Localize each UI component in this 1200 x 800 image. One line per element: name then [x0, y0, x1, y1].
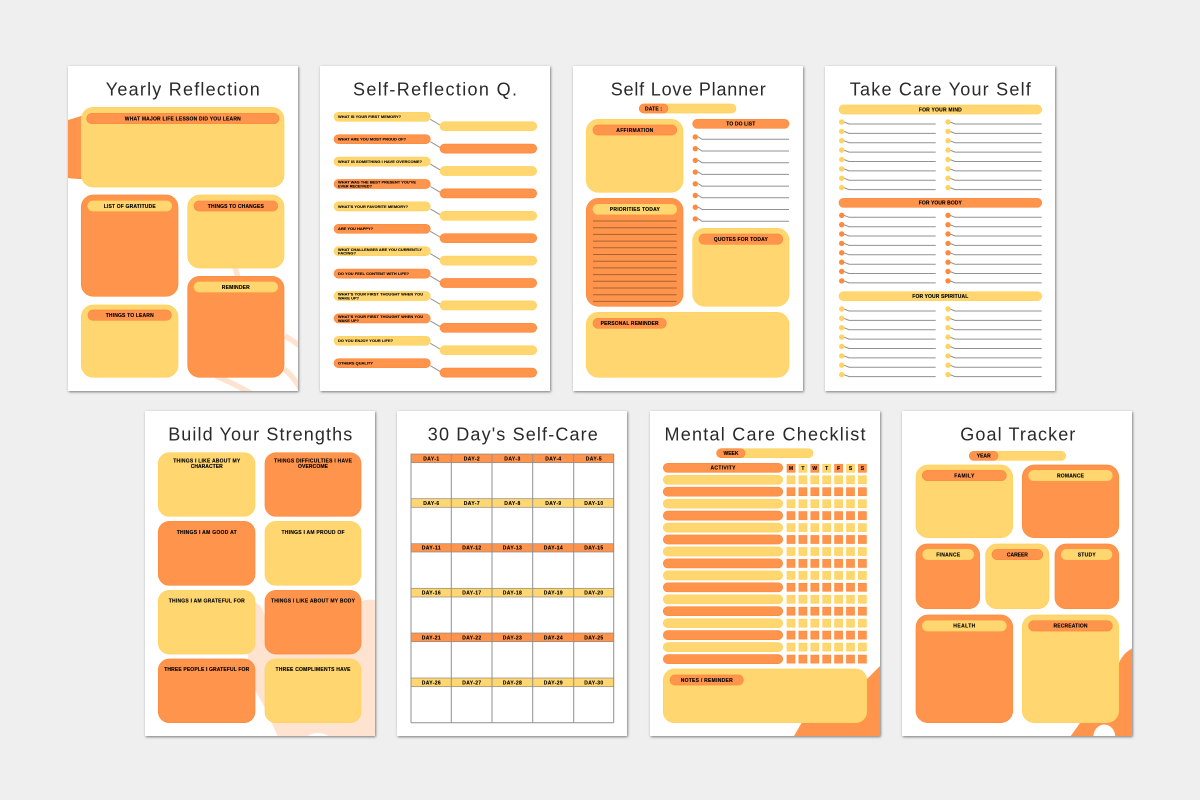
day labels: DAY-13	[503, 546, 522, 552]
panel: recreation	[1022, 615, 1119, 723]
day labels: DAY-22	[462, 635, 481, 641]
day labels: DAY-29	[544, 680, 563, 686]
day labels: DAY-2	[464, 456, 480, 462]
question row 11: DO YOU ENJOY YOUR LIFE?	[338, 338, 394, 343]
day labels: DAY-4	[545, 456, 561, 462]
week field	[717, 449, 813, 458]
title: Take Care Your Self	[850, 80, 1032, 100]
day labels: DAY-11	[422, 546, 441, 552]
ruled lines	[593, 221, 677, 301]
question row 12: OTHERS QUALITY	[338, 361, 373, 366]
panel: like about my character	[158, 453, 255, 516]
panel: three compliments: THREE COMPLIMENTS HAVE	[276, 667, 351, 673]
day labels: DAY-19	[544, 591, 563, 597]
title: Yearly Reflection	[106, 80, 260, 100]
label	[593, 318, 666, 328]
day labels: DAY-9	[545, 501, 561, 507]
page: Self Love Planner	[573, 66, 803, 391]
lines	[844, 122, 1042, 190]
day labels: DAY-30	[584, 680, 603, 686]
panel: difficulties overcome	[265, 453, 361, 516]
question row 6	[334, 224, 537, 243]
page: Yearly Reflection	[68, 66, 300, 394]
decorative corner	[794, 666, 880, 736]
panel: notes / reminder	[663, 669, 867, 723]
panel: family	[916, 465, 1013, 538]
weekday headers: F	[837, 466, 840, 472]
day labels: DAY-14	[544, 546, 563, 552]
year field: YEAR	[977, 454, 991, 460]
activity rows: ACTIVITY	[710, 466, 736, 472]
question row 9	[334, 292, 537, 310]
bullets	[839, 119, 951, 190]
label: RECREATION	[1054, 624, 1088, 630]
panel: major life lesson	[81, 107, 284, 187]
question row 10: WAKE UP?	[338, 318, 360, 323]
page: Build Your Strengths	[145, 411, 375, 743]
question row 10: WHAT'S YOUR FIRST THOUGHT WHEN YOU	[338, 314, 423, 319]
section: for your body: FOR YOUR BODY	[919, 201, 962, 207]
label: HEALTH	[953, 624, 976, 630]
question row 3	[334, 157, 537, 176]
calendar table	[411, 454, 614, 723]
label	[670, 675, 743, 685]
panel: like about my character: CHARACTER	[191, 464, 223, 470]
day labels: DAY-15	[584, 546, 603, 552]
question row 2	[334, 135, 537, 153]
panel: like about my body: THINGS I LIKE ABOUT MY BODY	[271, 598, 356, 604]
weekday headers: S	[849, 466, 853, 472]
decorative blob	[1070, 648, 1132, 736]
decorative blob	[248, 600, 375, 743]
question row 4: EVER RECEIVED?	[338, 183, 373, 188]
label: REMINDER	[222, 285, 250, 291]
day labels: DAY-27	[462, 680, 481, 686]
label: LIST OF GRATITUDE	[104, 204, 156, 210]
panel: three people	[158, 659, 255, 723]
to do bullets	[693, 134, 698, 222]
weekday headers: S	[861, 466, 865, 472]
label: FAMILY	[954, 473, 975, 479]
label: THINGS TO LEARN	[106, 313, 154, 319]
day labels: DAY-3	[504, 456, 521, 462]
question row 8	[334, 269, 537, 288]
question row 2: WHAT ARE YOU MOST PROUD OF?	[338, 137, 407, 142]
question row 7: WHAT CHALLENGES ARE YOU CURRENTLY	[338, 247, 422, 252]
weekday headers: T	[801, 466, 804, 472]
day labels: DAY-21	[422, 635, 441, 641]
day labels: DAY-25	[584, 635, 603, 641]
page: Take Care Your Self	[825, 66, 1055, 391]
question row 5	[334, 202, 537, 220]
question row 6: ARE YOU HAPPY?	[338, 226, 374, 231]
panel: three people: THREE PEOPLE I GRATEFUL FOR	[164, 667, 250, 673]
day labels: DAY-16	[422, 591, 441, 597]
section: for your body	[839, 198, 1042, 284]
panel: quotes for today	[693, 228, 789, 306]
panel: things to learn	[81, 305, 178, 377]
to do list: TO DO LIST	[726, 122, 755, 128]
panel: study	[1055, 544, 1119, 609]
header bands	[411, 454, 614, 687]
day labels: DAY-12	[462, 546, 481, 552]
panel: difficulties overcome: THINGS DIFFICULTIES I HAVE	[274, 458, 353, 464]
label: CAREER	[1007, 552, 1028, 558]
label: NOTES / REMINDER	[681, 678, 733, 684]
decorative shapes	[68, 115, 300, 394]
day labels: DAY-20	[584, 591, 603, 597]
question row 4: WHAT WAS THE BEST PRESENT YOU'VE	[338, 180, 416, 185]
date field: DATE :	[645, 106, 662, 112]
lines	[844, 309, 1042, 377]
to do lines	[698, 137, 789, 221]
weekday headers	[787, 464, 866, 472]
day labels: DAY-6	[423, 501, 439, 507]
panel: reminder	[188, 276, 284, 377]
panel: good at: THINGS I AM GOOD AT	[177, 530, 237, 536]
day labels: DAY-24	[544, 635, 563, 641]
question row 9: WHAT'S YOUR FIRST THOUGHT WHEN YOU	[338, 292, 423, 297]
day labels: DAY-5	[586, 456, 602, 462]
date field	[639, 104, 736, 113]
year field	[969, 451, 1066, 460]
question row 10	[334, 314, 537, 332]
section: for your mind: FOR YOUR MIND	[919, 107, 962, 113]
panel: personal reminder	[586, 312, 789, 377]
bullets	[839, 213, 951, 284]
panel: like about my character: THINGS I LIKE ABOUT MY	[173, 458, 241, 464]
panel: proud of	[265, 521, 361, 585]
day labels: DAY-1	[423, 456, 439, 462]
panel: three compliments	[265, 659, 361, 723]
weekday headers: T	[825, 466, 828, 472]
panel: priorities today	[586, 198, 683, 306]
title: 30 Day's Self-Care	[428, 425, 598, 445]
question row 7	[334, 247, 537, 265]
panel: career	[986, 544, 1049, 609]
label: FINANCE	[936, 552, 961, 558]
panel: grateful for	[158, 590, 255, 654]
day labels: DAY-8	[504, 501, 521, 507]
day labels: DAY-28	[503, 680, 522, 686]
label: ROMANCE	[1057, 473, 1085, 479]
panel: health	[916, 615, 1013, 723]
label: THINGS TO CHANGES	[208, 204, 264, 210]
panel: romance	[1022, 465, 1119, 538]
day labels: DAY-23	[503, 635, 522, 641]
label: WHAT MAJOR LIFE LESSON DID YOU LEARN	[125, 116, 241, 122]
panel: good at	[158, 521, 255, 585]
page: 30 Day's Self-Care	[397, 411, 627, 736]
section: for your spiritual	[839, 292, 1042, 377]
activity rows	[663, 463, 783, 664]
title: Mental Care Checklist	[664, 425, 866, 445]
section: for your spiritual: FOR YOUR SPIRITUAL	[912, 294, 968, 300]
day labels: DAY-10	[584, 501, 603, 507]
orange checkbox rows	[787, 488, 866, 663]
page: Mental Care Checklist	[650, 411, 880, 736]
panel: difficulties overcome: OVERCOME	[298, 464, 329, 470]
yellow checkbox rows	[787, 476, 866, 651]
bullets	[839, 306, 951, 377]
week field: WEEK	[724, 451, 739, 457]
question row 3: WHAT IS SOMETHING I HAVE OVERCOME?	[338, 159, 423, 164]
lines	[844, 215, 1042, 283]
page: Goal Tracker	[902, 411, 1133, 750]
day-of-week checkboxes	[787, 464, 866, 663]
day labels: DAY-17	[462, 591, 481, 597]
question row 12	[334, 359, 537, 377]
day labels	[422, 456, 603, 686]
question row 8: DO YOU FEEL CONTENT WITH LIFE?	[338, 271, 410, 276]
title: Goal Tracker	[960, 425, 1075, 445]
label: AFFIRMATION	[616, 128, 654, 134]
day labels: DAY-26	[422, 680, 441, 686]
panel: list of gratitude	[81, 195, 178, 296]
label	[87, 113, 279, 124]
page: Self-Reflection Q.	[320, 66, 550, 391]
question row 4	[334, 180, 537, 198]
question row 11	[334, 336, 537, 355]
question row 9: WAKE UP?	[338, 295, 360, 300]
weekday headers: M	[789, 466, 793, 472]
grid lines	[411, 454, 614, 723]
label: STUDY	[1078, 552, 1096, 558]
question row 7: FACING?	[338, 251, 357, 256]
label: PRIORITIES TODAY	[610, 207, 660, 213]
weekday headers: W	[812, 466, 817, 472]
label: QUOTES FOR TODAY	[714, 237, 768, 243]
day labels: DAY-18	[503, 591, 522, 597]
day labels: DAY-7	[464, 501, 480, 507]
to do list	[693, 119, 789, 222]
panel: affirmation	[586, 119, 683, 192]
panel: things to changes	[188, 195, 284, 268]
title: Build Your Strengths	[168, 425, 352, 445]
question row 1: WHAT IS YOUR FIRST MEMORY?	[338, 114, 402, 119]
panel: finance	[916, 544, 980, 609]
panel: grateful for: THINGS I AM GRATEFUL FOR	[169, 598, 245, 604]
section: for your mind	[839, 105, 1042, 190]
question row 1	[334, 112, 537, 131]
title: Self-Reflection Q.	[353, 80, 517, 100]
title: Self Love Planner	[611, 80, 766, 100]
label: PERSONAL REMINDER	[601, 321, 659, 327]
question row 5: WHAT'S YOUR FAVORITE MEMORY?	[338, 204, 409, 209]
panel: proud of: THINGS I AM PROUD OF	[282, 530, 344, 536]
panel: like about my body	[265, 590, 361, 654]
